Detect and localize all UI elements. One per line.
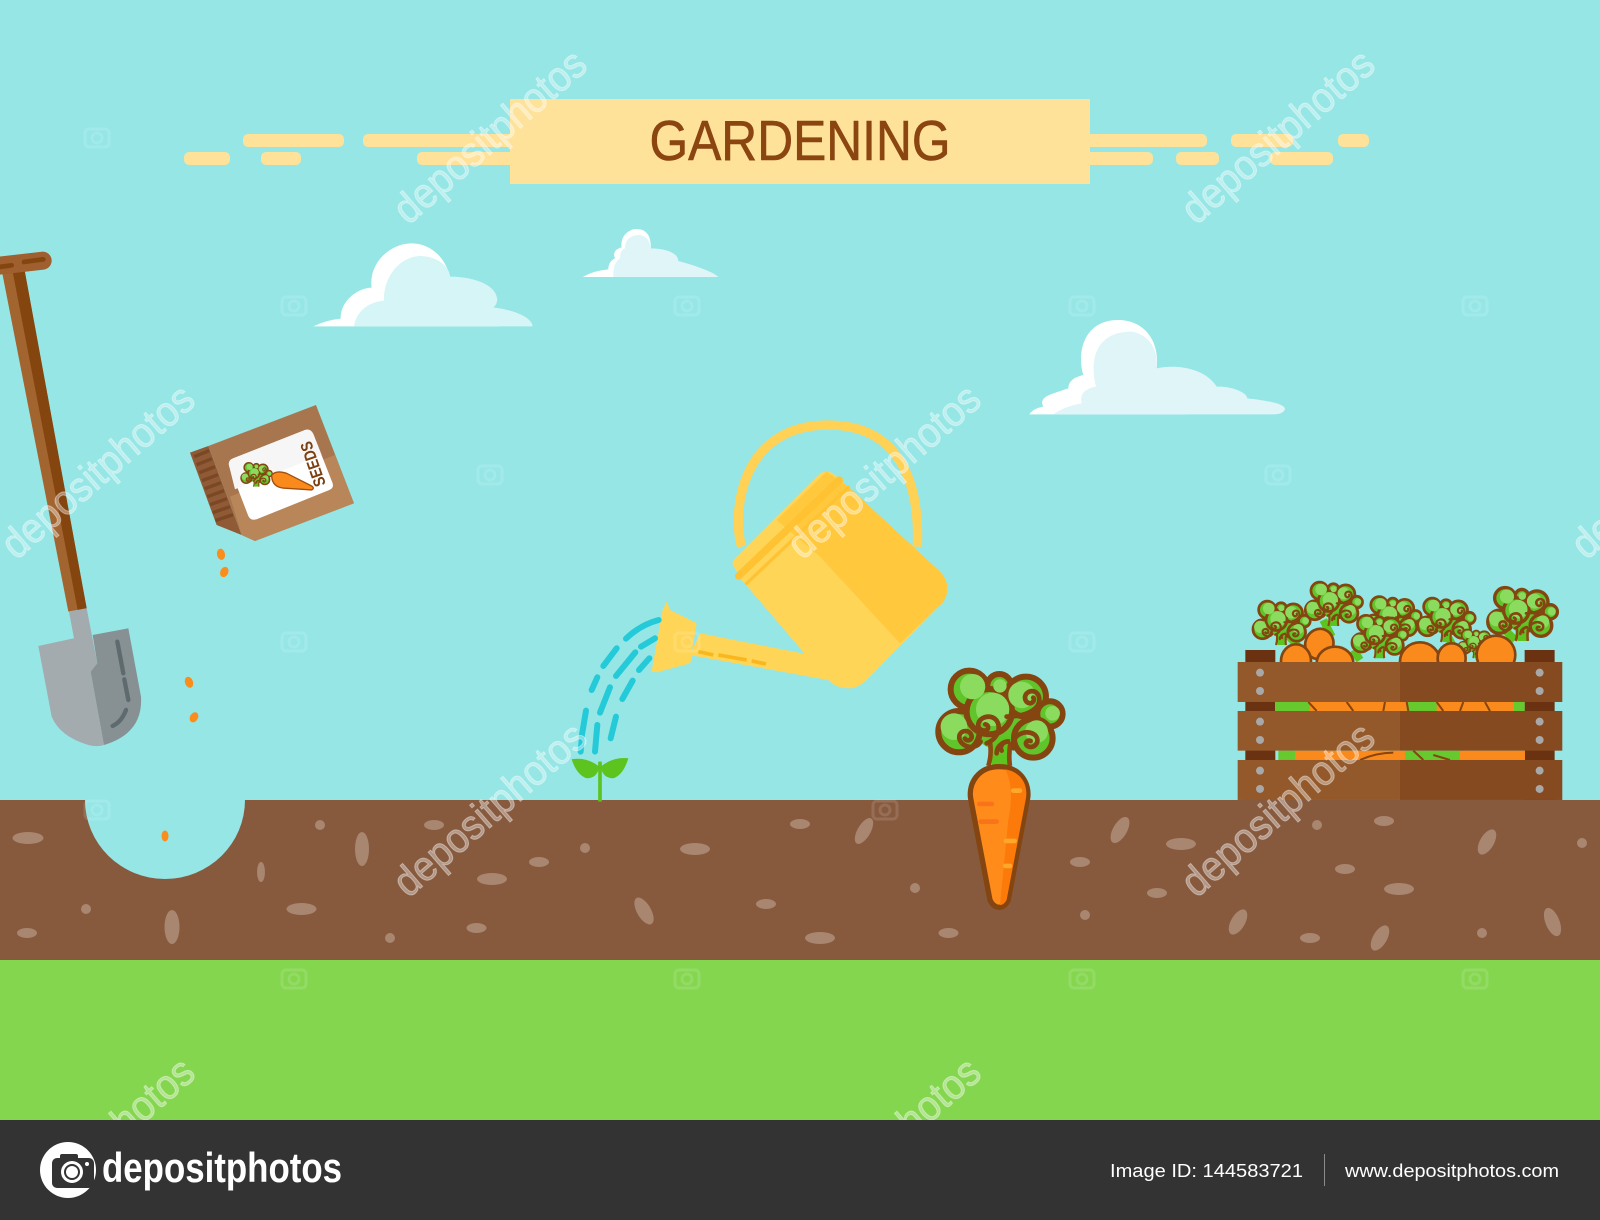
icon: watering can <box>652 425 947 688</box>
crate slats <box>1238 662 1562 800</box>
image id: Image ID: 144583721 <box>1110 1160 1303 1181</box>
icon: sprout <box>572 758 628 802</box>
watermark camera icons <box>85 129 1487 988</box>
watermarks: depositphotos <box>1172 40 1383 233</box>
falling seeds <box>183 548 230 724</box>
watermarks: depositphotos <box>384 713 595 906</box>
ground soil with pebbles <box>0 800 1600 960</box>
watermarks: depositphotos <box>384 40 595 233</box>
seed in hole <box>162 830 168 842</box>
icon: crate of carrots <box>1238 582 1562 800</box>
site url: www.depositphotos.com <box>1344 1160 1559 1181</box>
grass strip <box>0 960 1600 1120</box>
crate rivets <box>1256 669 1544 793</box>
icon: big carrot <box>938 671 1063 907</box>
icon: seed packet <box>190 405 354 541</box>
sky background <box>0 0 1600 800</box>
watermarks: depositphotos <box>1172 713 1383 906</box>
crate posts <box>1245 650 1555 800</box>
water drops <box>581 620 659 752</box>
cloud right <box>1029 320 1285 414</box>
footer logo wordmark: depositphotos <box>102 1144 342 1191</box>
seed label: SEEDS <box>297 439 330 489</box>
icon: shovel <box>0 259 141 746</box>
carrots in crate <box>1281 625 1515 681</box>
seed label <box>229 430 333 520</box>
carrot leaves in crate <box>1253 582 1557 660</box>
icon: footer logo camera <box>40 1142 96 1198</box>
title: GARDENING <box>650 109 950 173</box>
watermarks: depositphotos <box>778 375 989 568</box>
footer bar <box>0 1120 1600 1220</box>
planting hole <box>85 799 245 879</box>
cloud left <box>313 243 533 326</box>
footer divider <box>1324 1154 1325 1186</box>
title banner with dashes <box>184 99 1369 184</box>
contents seen between slats <box>1275 702 1525 760</box>
cloud middle <box>583 229 718 277</box>
